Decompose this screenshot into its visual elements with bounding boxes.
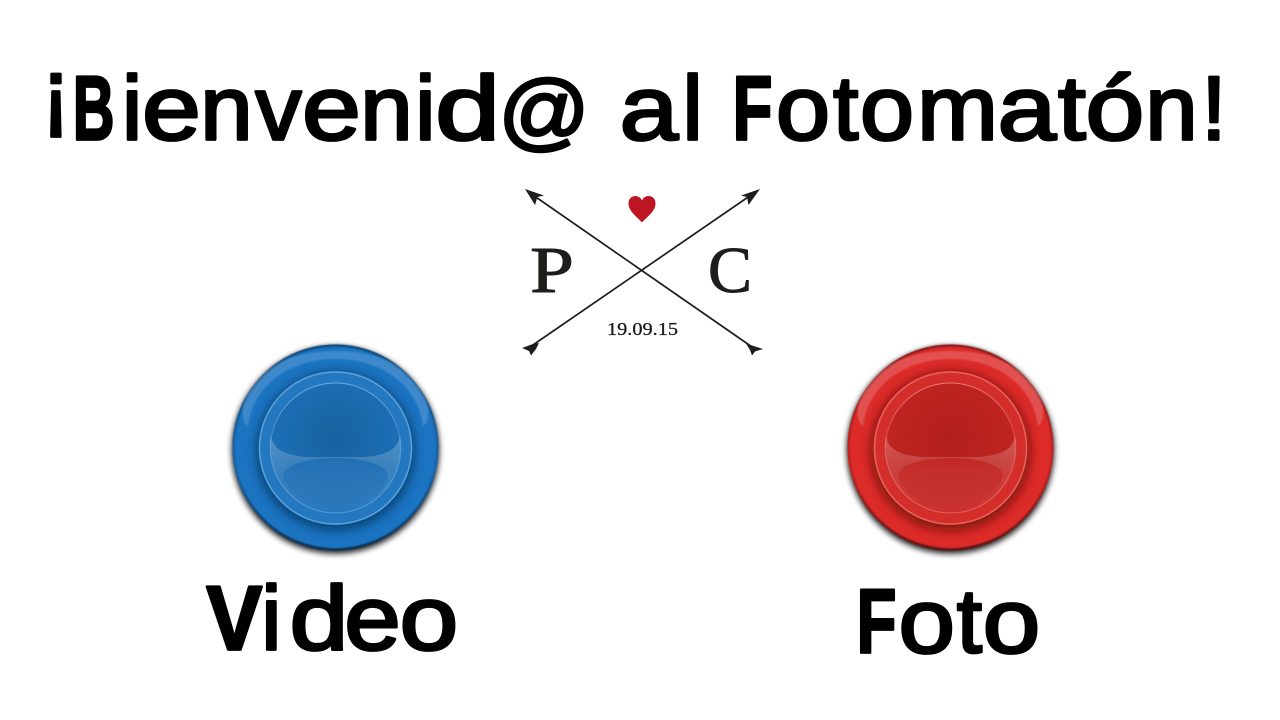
title: i <box>122 59 142 160</box>
title: d <box>435 59 500 160</box>
logo: crossed arrows with initials <box>522 189 763 356</box>
label: foto: t <box>957 572 982 673</box>
label: video: d <box>290 569 348 670</box>
title: l <box>682 59 703 160</box>
title: v <box>255 59 302 160</box>
title: a <box>620 59 679 160</box>
label: foto: F <box>857 572 896 673</box>
icon: heart <box>628 196 656 222</box>
arrow: top-right to bottom-left <box>522 189 760 356</box>
title: @ <box>499 64 590 159</box>
date: 19.09.15 <box>607 319 678 339</box>
title: t <box>833 59 858 160</box>
title: o <box>860 59 914 160</box>
label: video: V <box>206 569 262 670</box>
label: video: o <box>400 569 458 670</box>
title: e <box>142 59 201 160</box>
title: ó <box>1086 59 1144 160</box>
label: foto: o <box>983 572 1040 673</box>
initial C: C <box>708 234 752 307</box>
title: n <box>1145 59 1198 160</box>
title: n <box>360 59 413 160</box>
title: e <box>302 59 361 160</box>
button: foto (red) <box>846 344 1054 554</box>
label: foto: o <box>899 572 955 673</box>
title: m <box>917 59 998 160</box>
title: ¡ <box>41 41 71 142</box>
title: n <box>200 59 253 160</box>
label: video: i <box>261 569 282 670</box>
button: video (blue) <box>232 344 440 554</box>
title: t <box>1058 59 1086 160</box>
title: ! <box>1201 59 1226 160</box>
initial P: P <box>530 234 574 307</box>
title: i <box>415 59 436 160</box>
title: a <box>998 59 1057 160</box>
title: o <box>776 59 830 160</box>
title: F <box>733 59 772 160</box>
label: video: e <box>344 569 401 670</box>
arrow: top-left to bottom-right <box>525 189 763 356</box>
title: B <box>73 59 114 160</box>
